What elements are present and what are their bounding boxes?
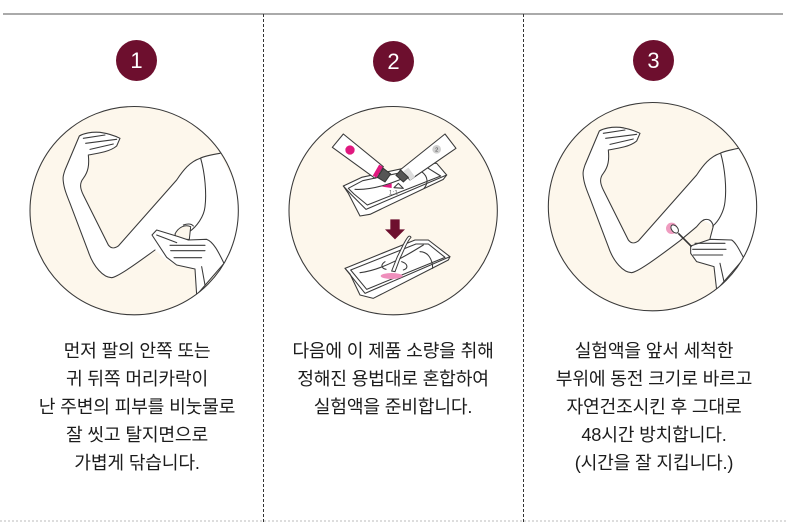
swab (382, 236, 411, 272)
arrow (385, 219, 405, 239)
step 2 text (292, 340, 494, 416)
step 2 number (373, 41, 414, 82)
step 3 text: 자연건조시킨 후 그대로 (566, 396, 742, 416)
ratio label: 1:1 (389, 189, 398, 196)
tray top (343, 163, 447, 216)
step 3 text: 부위에 동전 크기로 바르고 (556, 368, 752, 388)
swab tip (669, 223, 692, 247)
step 3 text (556, 340, 752, 473)
applied spot (666, 223, 677, 234)
step 1 number: 1 (130, 48, 143, 73)
step 2 number: 2 (387, 49, 400, 74)
illustration: mixing tubes in tray (289, 107, 497, 315)
step 3 number: 3 (647, 48, 660, 73)
step 2 text: 정해진 용법대로 혼합하여 (297, 368, 489, 388)
tray bottom (345, 240, 450, 298)
step 3 text: 실험액을 앞서 세척한 (575, 340, 733, 360)
step 3 number (633, 40, 674, 81)
illustration: applying with swab (548, 103, 773, 311)
step 1 text (39, 340, 235, 472)
step 1 number (116, 40, 157, 81)
mixture (381, 273, 403, 279)
illustration: washing inner arm (30, 107, 253, 315)
step 1 text: 먼저 팔의 안쪽 또는 (64, 340, 210, 360)
step 1 text: 가볍게 닦습니다. (74, 452, 200, 472)
step 2 text: 다음에 이 제품 소량을 취해 (292, 340, 494, 360)
step 1 text: 난 주변의 피부를 비눗물로 (39, 396, 235, 416)
tube 2 (396, 134, 456, 182)
step 1 text: 귀 뒤쪽 머리카락이 (66, 368, 208, 388)
step 3 text: (시간을 잘 지킵니다.) (575, 452, 733, 472)
step 1 text: 잘 씻고 탈지면으로 (66, 424, 208, 444)
tube 2: 2 (435, 147, 438, 153)
step 3 text: 48시간 방치합니다. (581, 424, 727, 444)
step 2 text: 실험액을 준비합니다. (314, 396, 472, 416)
tube 1 (332, 134, 391, 182)
